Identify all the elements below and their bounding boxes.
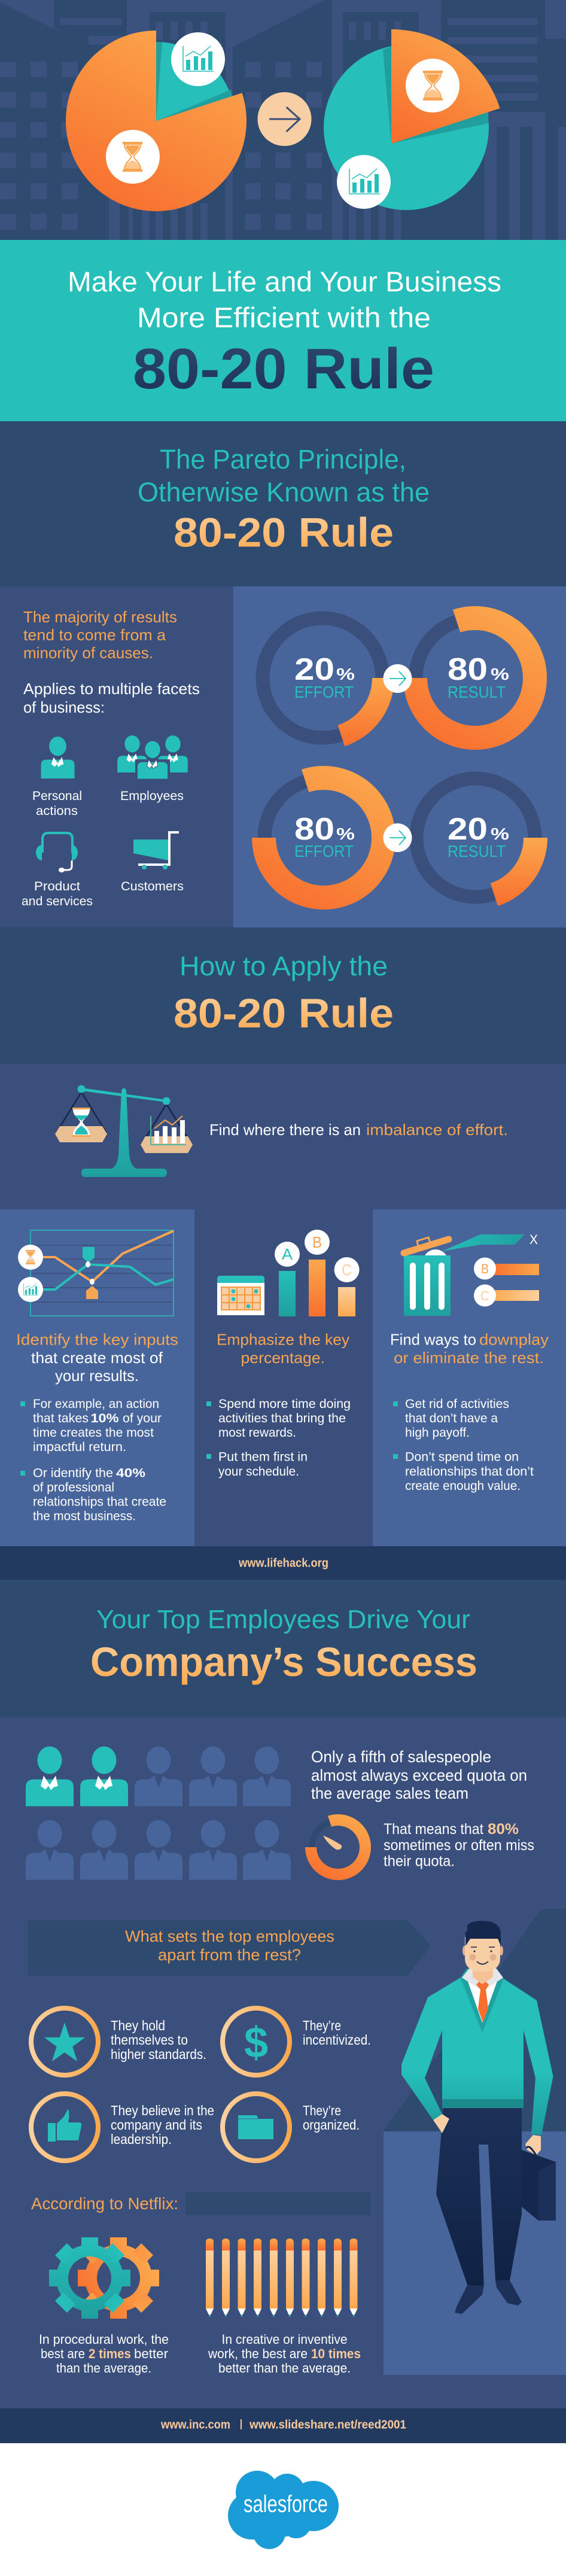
- bullet: 40 percent: of professional: [33, 1480, 114, 1495]
- text: 80 percent miss quota: That means that: [384, 1821, 483, 1838]
- bar chart: A B C: B: [312, 1233, 322, 1251]
- bullet: relationships: relationships that don’t: [405, 1465, 534, 1479]
- icon: employees: [117, 735, 188, 803]
- arrow between pies: [257, 92, 311, 146]
- left pie chart: 80 percent effort: [66, 31, 247, 211]
- panel: effort and result donuts: [233, 586, 566, 927]
- arrow: bottom donuts: [383, 823, 412, 852]
- background shape behind man: [384, 1909, 566, 2131]
- heading: identify: [16, 1331, 178, 1385]
- text: only a fifth: almost always exceed quota on: [311, 1766, 527, 1784]
- banner: what sets the top employees apart: [28, 1920, 431, 1976]
- section heading: Pareto Principle: Otherwise Known as the: [138, 477, 430, 507]
- bullet: spend more time: [206, 1397, 351, 1440]
- arrow: top donuts: [383, 664, 412, 693]
- text: find imbalance of effort: imbalance of effort.: [366, 1121, 508, 1139]
- hands: [433, 2114, 541, 2155]
- item: organized: organized.: [303, 2117, 360, 2133]
- section heading: top employees: [0, 1580, 566, 1717]
- text: majority statement: tend to come from a: [23, 626, 166, 644]
- bullet: 10 percent: impactful return.: [33, 1440, 126, 1454]
- title band: 80-20 Rule: [133, 337, 434, 401]
- source strip: lifehack: [0, 1546, 566, 1580]
- icon: headset: and services: [22, 895, 93, 908]
- source strip: inc and slideshare: www.inc.com: [160, 2419, 230, 2432]
- bar chart: A B C: [275, 1230, 360, 1316]
- donut: 80 percent effort: EFFORT: [294, 842, 354, 860]
- title band: [0, 240, 566, 421]
- text: majority statement: The majority of results: [23, 608, 177, 626]
- title band: More Efficient with the: [137, 302, 431, 333]
- icon: shopping cart: [121, 832, 184, 893]
- section heading: Pareto Principle: [0, 421, 566, 586]
- tie: [476, 1978, 489, 2023]
- item: higher standards: themselves to: [111, 2032, 188, 2048]
- source strip: inc and slideshare: www.slideshare.net/reed2001: [249, 2419, 406, 2432]
- section heading: top employees: Your Top Employees Drive Your: [96, 1605, 470, 1634]
- item: believe in company: company and its: [111, 2117, 202, 2133]
- text: procedural work: than the average.: [56, 2361, 151, 2376]
- bullet: 10 percent: [20, 1397, 162, 1454]
- donut: 20 percent effort: EFFORT: [294, 683, 354, 701]
- heading: emphasize: Emphasize the key: [217, 1331, 349, 1349]
- icon: trash can with tasks: B: [481, 1261, 489, 1276]
- bullet: 10 percent: that takes: [33, 1412, 89, 1425]
- icon: chart in white circle: [337, 155, 391, 209]
- donut: 80 percent result: %: [491, 665, 509, 683]
- text: 80 percent miss quota: 80%: [488, 1821, 519, 1838]
- text: procedural work: 2 times: [89, 2346, 131, 2361]
- bullet: relationships: [393, 1450, 534, 1493]
- icon: gears: [49, 2237, 159, 2319]
- bullet: 10 percent: For example, an action: [33, 1397, 159, 1411]
- source strip: inc and slideshare: [0, 2408, 566, 2443]
- item: organized: They’re: [303, 2103, 341, 2118]
- bullet: get rid: high payoff.: [405, 1426, 470, 1440]
- bullet: 40 percent: the most business.: [33, 1510, 136, 1523]
- bullet: 10 percent: of your: [123, 1412, 162, 1425]
- donut: 80 percent effort: %: [336, 825, 355, 843]
- icon: trash can with tasks: X: [530, 1232, 538, 1247]
- heading: find ways: Find ways to: [390, 1331, 476, 1349]
- heading: find ways: [390, 1331, 549, 1367]
- icon: trash can with tasks: [404, 1232, 539, 1316]
- trousers: [436, 2108, 522, 2286]
- panel: downplay or eliminate: [373, 1209, 566, 1546]
- donut: 20 percent effort: [263, 618, 394, 746]
- item: incentivized: [223, 2008, 371, 2075]
- text: procedural work: better: [134, 2346, 168, 2361]
- icon: employees: Employees: [120, 789, 184, 803]
- bar chart: A B C: C: [342, 1261, 352, 1279]
- bullet: get rid: Get rid of activities: [405, 1397, 509, 1411]
- text: 80 percent miss quota: sometimes or often miss: [384, 1837, 534, 1854]
- line chart: inputs: [18, 1230, 174, 1316]
- shirt and collar: [461, 1969, 504, 2033]
- bullet: 40 percent: [20, 1466, 166, 1523]
- text: creative work: 10 times: [311, 2346, 361, 2361]
- source strip: lifehack: www.lifehack.org: [238, 1557, 328, 1570]
- text: only a fifth: Only a fifth of salespeople: [311, 1748, 491, 1766]
- donut: 20 percent result: RESULT: [448, 842, 506, 860]
- icon: personal actions: actions: [36, 804, 78, 818]
- bullet: spend more time: most rewards.: [218, 1426, 296, 1440]
- heading: emphasize: [217, 1331, 349, 1367]
- text: procedural work: best are: [41, 2346, 85, 2361]
- bullet: relationships: create enough value.: [405, 1479, 521, 1493]
- item: organized: [223, 2094, 360, 2161]
- text: 80 percent miss quota: their quota.: [384, 1853, 455, 1870]
- icon: hourglass in white circle: [406, 59, 460, 112]
- donut: 80 percent result: [403, 606, 547, 750]
- icon: dollar: $: [244, 2019, 268, 2067]
- section heading: Pareto Principle: 80-20 Rule: [174, 510, 394, 555]
- section heading: How to Apply: [0, 927, 566, 1064]
- icon: calendar: [217, 1276, 264, 1315]
- text: procedural work: In procedural work, the: [39, 2332, 169, 2347]
- text: creative work: In creative or inventive: [221, 2332, 347, 2347]
- icon: shopping cart: Customers: [121, 880, 184, 893]
- illustration: business man: [401, 1921, 556, 2314]
- heading: identify: that create most of: [31, 1349, 163, 1367]
- logo: salesforce cloud: [228, 2471, 339, 2549]
- item: believe in company: They believe in the: [111, 2103, 214, 2118]
- heading: find ways: downplay: [479, 1331, 549, 1349]
- icon: headset: [22, 833, 93, 908]
- icon: personal actions: Personal: [32, 789, 82, 803]
- heading: according to Netflix: [31, 2192, 370, 2215]
- donut: 20 percent result: [416, 778, 547, 906]
- floor panel behind man: [384, 2131, 566, 2375]
- footer: white background: [0, 2443, 566, 2576]
- teal gear: [49, 2237, 130, 2319]
- donut: 80 percent effort: 80: [294, 812, 334, 847]
- panel: majority of results: [0, 586, 233, 927]
- panel: how-to background: [0, 1064, 566, 1546]
- text: applies to business: [23, 680, 200, 716]
- gauge: 80 percent: [305, 1814, 371, 1880]
- briefcase: [522, 2150, 556, 2221]
- icon: hourglass in white circle: [106, 130, 160, 184]
- heading: identify: your results.: [55, 1367, 139, 1385]
- orange gear: [78, 2237, 159, 2319]
- icon: ten pencils: [206, 2239, 358, 2317]
- bullet: 40 percent: Or identify the: [33, 1466, 113, 1480]
- item: higher standards: They hold: [111, 2018, 165, 2033]
- donut: 80 percent result: 80: [448, 652, 488, 687]
- icon: star: [31, 2008, 98, 2075]
- logo: salesforce cloud: salesforce: [244, 2491, 328, 2517]
- text: 80 percent miss quota: [384, 1821, 534, 1870]
- text: creative work: work, the best are: [208, 2346, 308, 2361]
- pictogram: ten salespeople: [26, 1747, 291, 1880]
- section heading: top employees: Company’s Success: [90, 1639, 477, 1685]
- bullet: 40 percent: 40%: [116, 1466, 145, 1480]
- icon: personal actions: [32, 737, 82, 818]
- section heading: Pareto Principle: The Pareto Principle,: [160, 444, 406, 475]
- bullet: spend more time: Spend more time doing: [218, 1397, 351, 1411]
- donut: 80 percent effort: [252, 766, 395, 910]
- heading: according to Netflix: According to Netflix:: [31, 2194, 178, 2213]
- donut: 20 percent effort: 20: [294, 652, 334, 687]
- text: creative work: [208, 2332, 361, 2376]
- donut: 80 percent result: RESULT: [448, 683, 506, 701]
- icon: folder: [223, 2094, 290, 2161]
- item: higher standards: [31, 2008, 206, 2075]
- bullet: 10 percent: time creates the most: [33, 1426, 154, 1440]
- text: find imbalance of effort: Find where there is an: [209, 1121, 361, 1139]
- bullet: relationships: Don’t spend time on: [405, 1450, 519, 1464]
- sweater: [401, 1978, 553, 2135]
- donut: 20 percent result: 20: [448, 812, 488, 847]
- item: higher standards: higher standards.: [111, 2046, 206, 2062]
- hero: city skyline background: [0, 0, 566, 240]
- icon: trash can with tasks: C: [480, 1288, 489, 1303]
- title band: Make Your Life and Your Business: [68, 266, 501, 297]
- head: [462, 1921, 503, 1984]
- icon: balance scale: [55, 1085, 193, 1177]
- bullet: get rid: that don’t have a: [405, 1412, 498, 1425]
- bullet: first in schedule: Put them first in: [218, 1450, 308, 1464]
- section heading: How to Apply: How to Apply the: [179, 951, 388, 981]
- item: believe in company: leadership.: [111, 2131, 172, 2147]
- text: majority statement: minority of causes.: [23, 644, 153, 662]
- icon: chart in white circle: [171, 32, 225, 86]
- shoes: [455, 2280, 522, 2314]
- text: find imbalance of effort: [209, 1121, 508, 1139]
- item: incentivized: They’re: [303, 2018, 341, 2033]
- heading: identify: Identify the key inputs: [16, 1331, 178, 1349]
- section heading: How to Apply: 80-20 Rule: [174, 990, 394, 1036]
- text: only a fifth: the average sales team: [311, 1784, 468, 1802]
- item: incentivized: incentivized.: [303, 2032, 371, 2048]
- heading: find ways: or eliminate the rest.: [394, 1349, 544, 1367]
- text: applies to business: of business:: [23, 698, 105, 716]
- icon: thumbs up: [31, 2094, 98, 2161]
- bar chart: A B C: A: [282, 1245, 293, 1263]
- icon: dollar: [223, 2008, 290, 2075]
- banner: what sets the top employees apart: What sets the top employees: [125, 1927, 334, 1945]
- panel: employees background: [0, 1717, 566, 2408]
- bullet: spend more time: activities that bring the: [218, 1412, 346, 1425]
- banner: what sets the top employees apart: apart from the rest?: [158, 1946, 301, 1964]
- text: procedural work: [39, 2332, 169, 2376]
- item: believe in company: [31, 2094, 214, 2161]
- bullet: get rid: [393, 1397, 509, 1440]
- donut: 20 percent result: %: [491, 825, 509, 843]
- heading: emphasize: percentage.: [241, 1349, 325, 1367]
- panel: emphasize the key percentage: [206, 1230, 360, 1479]
- text: only a fifth: [311, 1748, 527, 1802]
- text: applies to business: Applies to multiple facets: [23, 680, 200, 698]
- bullet: 40 percent: relationships that create: [33, 1495, 166, 1509]
- right pie chart: 20 percent effort: [324, 29, 500, 210]
- bullet: 10 percent: 10%: [91, 1412, 119, 1425]
- text: creative work: better than the average.: [218, 2361, 351, 2376]
- icon: headset: Product: [34, 880, 80, 893]
- donut: 20 percent effort: %: [336, 665, 355, 683]
- panel: identify the key inputs: [0, 1209, 194, 1546]
- bullet: first in schedule: [206, 1450, 308, 1479]
- text: majority statement: [23, 608, 177, 662]
- bullet: first in schedule: your schedule.: [218, 1465, 299, 1479]
